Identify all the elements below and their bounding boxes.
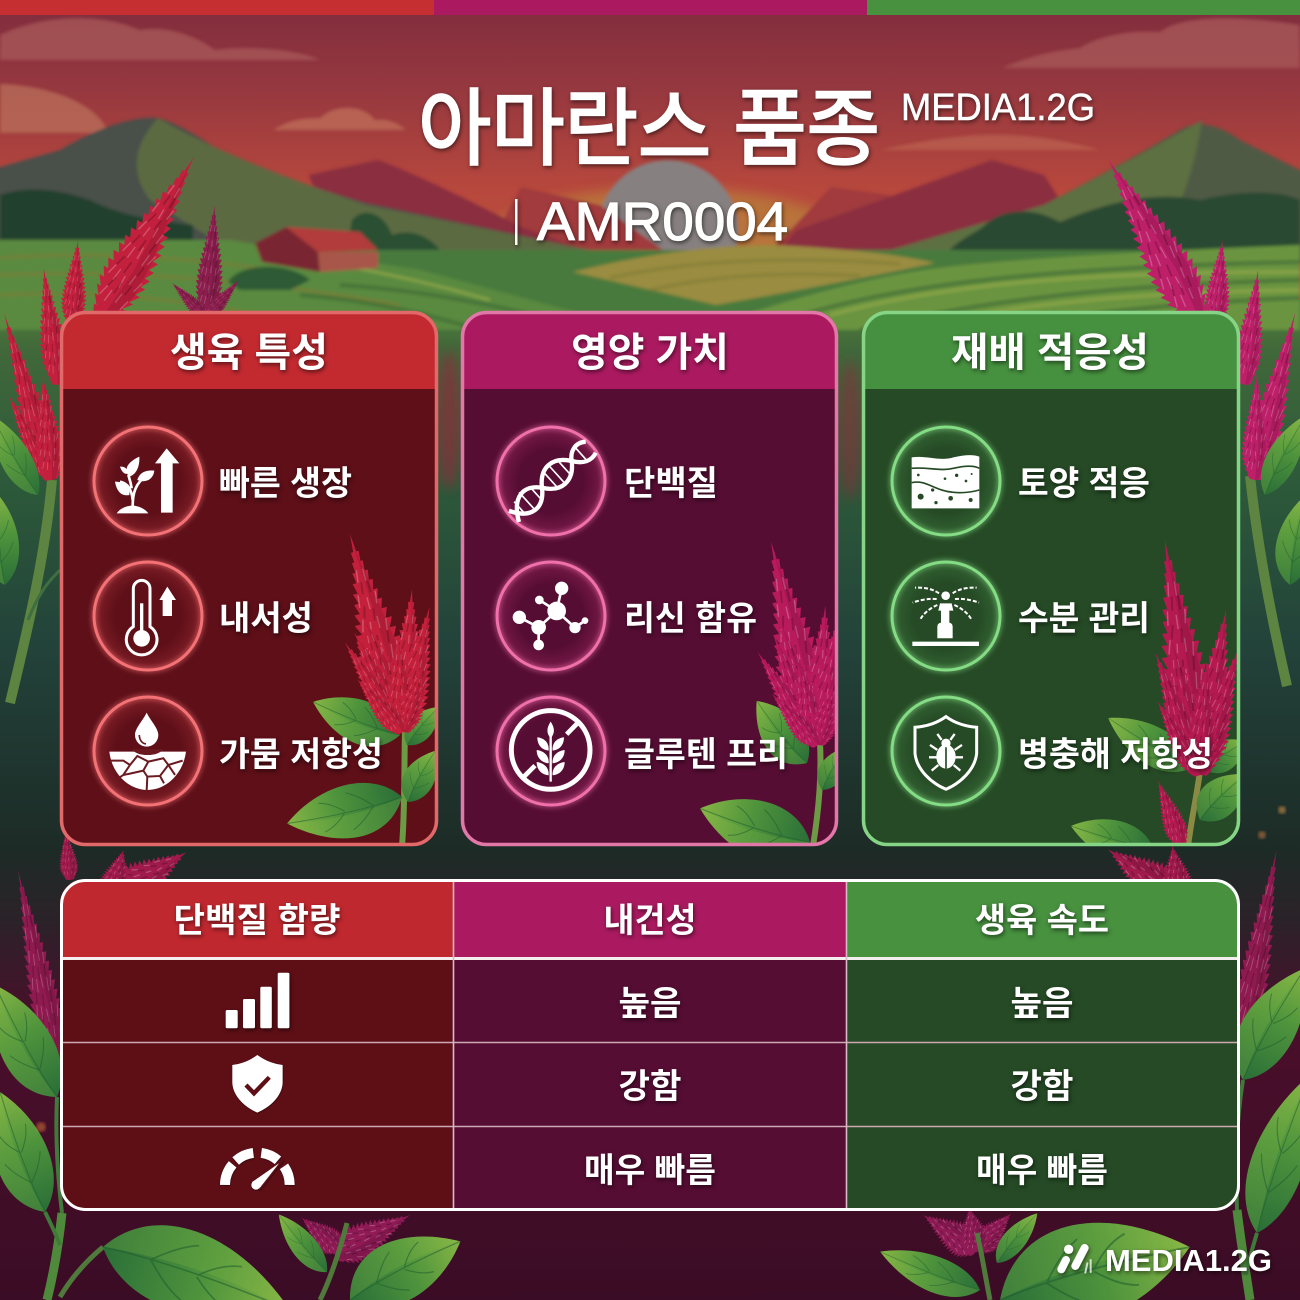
- label: 단백질: [624, 465, 718, 503]
- icon: lysine molecule: [497, 562, 605, 670]
- heading: 영양 가치: [571, 331, 729, 375]
- heading: 생육 특성: [170, 331, 328, 375]
- background stems and leaves: side margins: [0, 407, 1300, 1300]
- label: 수분 관리: [1018, 600, 1150, 638]
- subtitle code: AMR0004: [537, 192, 788, 252]
- top colour bar: [0, 0, 1300, 15]
- cell: 높음: [618, 985, 682, 1023]
- label: 리신 함유: [624, 600, 757, 638]
- table header: protein: 단백질 함량: [174, 902, 340, 940]
- icon: gluten free: [497, 697, 605, 805]
- label: 병충해 저항성: [1018, 736, 1213, 774]
- icon: speedometer: [225, 1153, 290, 1190]
- panel: cultivation adaptability: [862, 311, 1258, 868]
- panel: nutritional value: [461, 311, 857, 871]
- cell: 매우 빠름: [976, 1152, 1108, 1190]
- cell: 강함: [618, 1068, 682, 1106]
- icon: signal bars: [226, 973, 289, 1028]
- icon: drought resistance: [94, 697, 202, 805]
- label: 가뭄 저항성: [219, 736, 383, 774]
- background plumes: left and top-left: [0, 145, 245, 703]
- label: 내서성: [219, 600, 313, 638]
- cell: 강함: [1010, 1068, 1074, 1106]
- cell: 높음: [1010, 985, 1074, 1023]
- heading: 재배 적응성: [951, 331, 1149, 375]
- table header: drought tolerance: 내건성: [604, 902, 696, 940]
- plant illustration: magenta amaranth: [700, 542, 835, 843]
- table header: growth speed: 생육 속도: [975, 902, 1109, 940]
- cell: 매우 빠름: [584, 1152, 716, 1190]
- plant illustration: crimson amaranth: [1071, 540, 1237, 843]
- logo: MEDIA1.2G: MEDIA1.2G: [1105, 1243, 1272, 1278]
- label: 글루텐 프리: [624, 736, 788, 774]
- background plumes: right and top-right: [1087, 147, 1300, 686]
- icon: heat tolerance: [94, 562, 202, 670]
- comparison table: [60, 879, 1240, 1211]
- icon: pest shield: [892, 697, 1000, 805]
- version label: MEDIA1.2G: [901, 87, 1095, 129]
- title: 아마란스 품종: [418, 82, 880, 176]
- icon: sprinkler: [892, 562, 1000, 670]
- icon: soil: [892, 427, 1000, 535]
- background plants: bottom row: [36, 1122, 1202, 1300]
- panel: growth traits: [60, 311, 448, 852]
- icon: shield check: [232, 1055, 283, 1113]
- logo mark: [1061, 1245, 1091, 1273]
- icon: DNA protein: [497, 427, 605, 535]
- label: 토양 적응: [1018, 465, 1150, 503]
- plant illustration: red amaranth: [287, 534, 435, 843]
- icon: fast growth: [94, 427, 202, 535]
- label: 빠른 생장: [219, 465, 352, 503]
